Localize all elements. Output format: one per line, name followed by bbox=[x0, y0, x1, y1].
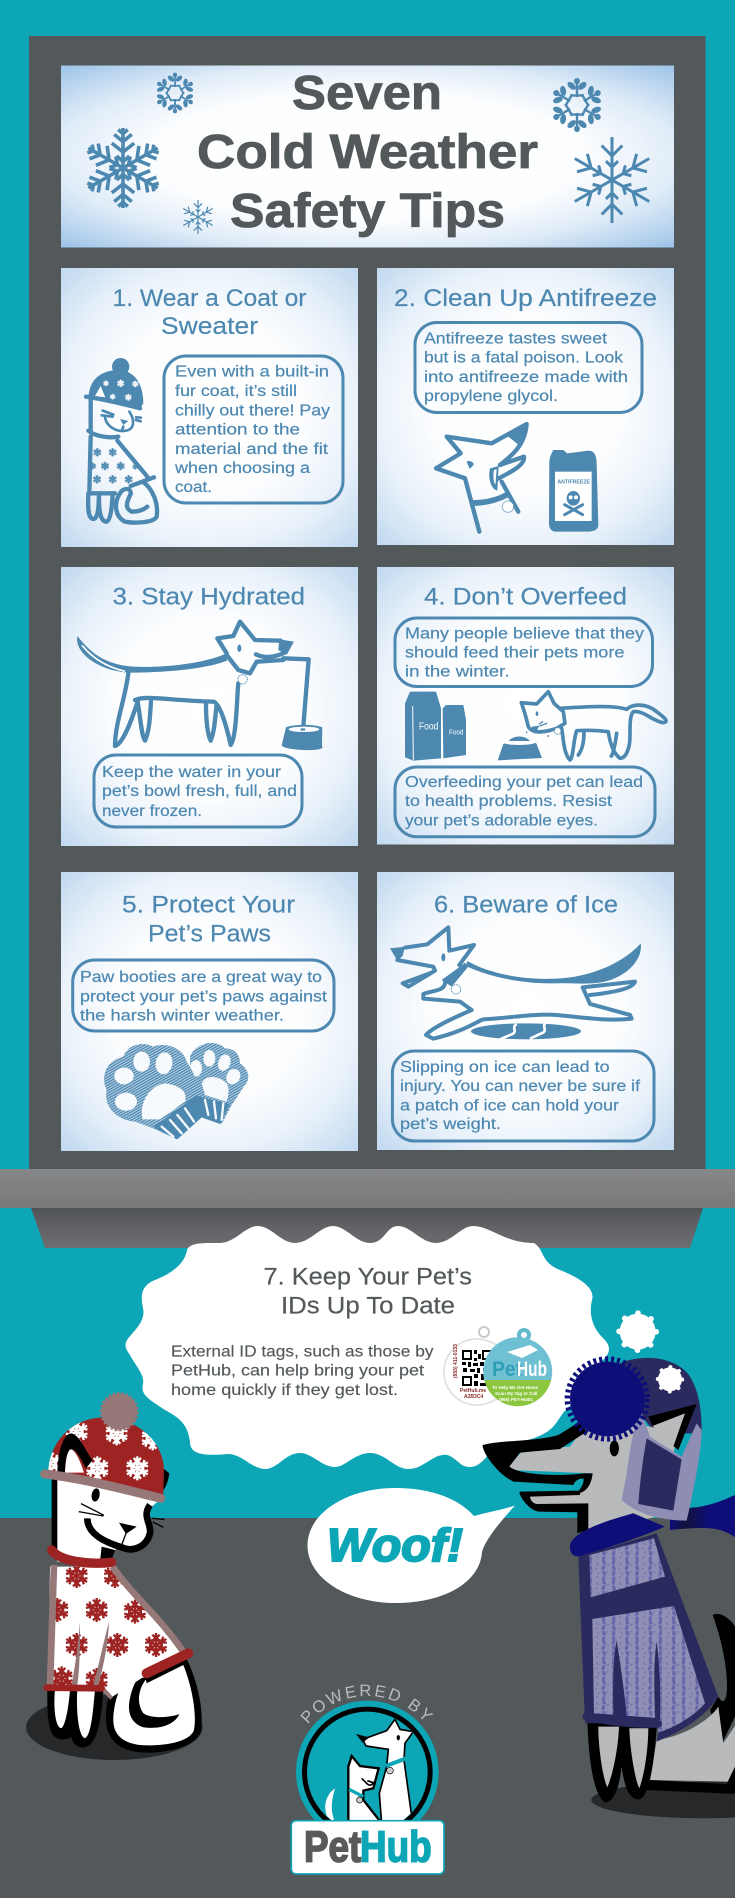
icon: pet id tags: Pet bbox=[492, 1358, 522, 1381]
logo: powered by pethub bbox=[290, 1684, 445, 1875]
heading: 4. Don’t Overfeed bbox=[424, 584, 627, 611]
callout: in the winter. bbox=[405, 664, 510, 680]
panel: tip 6 bbox=[377, 872, 674, 1150]
powered by arc: POWERED BY bbox=[300, 1684, 434, 1724]
callout: Slipping on ice can lead to bbox=[400, 1059, 610, 1076]
callout: a patch of ice can hold your bbox=[400, 1097, 619, 1114]
icon: pet id tags: PetHub.me bbox=[460, 1388, 486, 1394]
callout: into antifreeze made with bbox=[424, 369, 628, 386]
callout bbox=[415, 322, 642, 412]
heading: 2. Clean Up Antifreeze bbox=[394, 285, 657, 312]
callout: Many people believe that they bbox=[405, 626, 644, 643]
callout: Even with a built-in bbox=[175, 364, 329, 381]
heading: Pet’s Paws bbox=[148, 920, 271, 948]
icon: antifreeze jug: ANTIFREEZE bbox=[557, 480, 590, 486]
heading: 7. Keep Your Pet’s bbox=[264, 1264, 472, 1290]
icon: pet id tags: (855) PET-HUB1 bbox=[499, 1397, 534, 1402]
icon: paw booties bbox=[104, 1043, 248, 1139]
icon: snowflakes bbox=[83, 73, 654, 234]
icon: food bags bbox=[405, 692, 466, 761]
icon: cat in hat and sweater bbox=[86, 358, 157, 523]
body text: home quickly if they get lost. bbox=[171, 1382, 398, 1399]
icon: cat eating bbox=[498, 692, 666, 760]
icon: pet id tags: Hub bbox=[517, 1358, 547, 1381]
panel: title bbox=[61, 66, 674, 248]
callout: Antifreeze tastes sweet bbox=[424, 330, 608, 348]
heading: 5. Protect Your bbox=[122, 892, 295, 919]
callout: pet’s weight. bbox=[400, 1116, 501, 1133]
icon: dog drinking from bowl bbox=[77, 622, 323, 750]
icon: dog licking up bbox=[436, 423, 527, 532]
dog character bbox=[483, 1313, 735, 1818]
icon: pet id tags: (855) 411-0133 bbox=[453, 1344, 459, 1378]
title: Cold Weather bbox=[197, 126, 538, 179]
callout: chilly out there! Pay bbox=[175, 402, 330, 419]
callout: Paw booties are a great way to bbox=[80, 969, 322, 986]
callout: pet’s bowl fresh, full, and bbox=[102, 783, 297, 800]
heading bbox=[122, 892, 295, 948]
heading: 6. Beware of Ice bbox=[434, 892, 618, 919]
title: Safety Tips bbox=[230, 185, 505, 238]
logo: powered by pethub: Pet bbox=[304, 1823, 362, 1872]
callout: injury. You can never be sure if bbox=[400, 1078, 641, 1095]
callout: protect your pet’s paws against bbox=[80, 988, 328, 1006]
icon: pet id tags: A2B3C4 bbox=[464, 1394, 483, 1400]
body text: External ID tags, such as those by bbox=[171, 1344, 434, 1361]
title: Seven bbox=[292, 67, 442, 120]
callout: Overfeeding your pet can lead bbox=[405, 774, 643, 791]
panel: tip 2 bbox=[377, 268, 674, 545]
logo: powered by pethub: Hub bbox=[360, 1823, 432, 1872]
callout: Keep the water in your bbox=[102, 764, 281, 781]
body text bbox=[171, 1344, 434, 1399]
panel: tip 1 bbox=[61, 268, 358, 547]
callout: fur coat, it’s still bbox=[175, 383, 297, 400]
callout: the harsh winter weather. bbox=[80, 1008, 284, 1024]
speech bubble: woof bbox=[308, 1488, 515, 1603]
heading: 1. Wear a Coat or bbox=[112, 285, 306, 312]
dark window panel bbox=[29, 36, 706, 1170]
callout bbox=[164, 356, 343, 503]
icon: pet id tags: To Help Me Get Home bbox=[492, 1385, 539, 1390]
icon: food bags: Food bbox=[449, 727, 463, 736]
heading: 3. Stay Hydrated bbox=[112, 584, 305, 611]
woof text: Woof! bbox=[327, 1519, 463, 1571]
heading: IDs Up To Date bbox=[281, 1293, 455, 1320]
body text: PetHub, can help bring your pet bbox=[171, 1363, 425, 1380]
callout: material and the fit bbox=[175, 441, 329, 458]
callout bbox=[395, 618, 652, 686]
heading: Sweater bbox=[161, 313, 258, 340]
callout: should feed their pets more bbox=[405, 644, 624, 662]
panel: tip 5 bbox=[61, 872, 358, 1151]
ground bbox=[0, 1518, 735, 1898]
callout: coat. bbox=[175, 479, 212, 496]
icon: pet id tags: Scan My Tag or Call bbox=[495, 1391, 537, 1396]
callout bbox=[392, 1051, 654, 1141]
callout bbox=[94, 755, 302, 827]
callout: attention to the bbox=[175, 422, 300, 439]
callout: your pet’s adorable eyes. bbox=[405, 813, 598, 830]
panel: tip 4 bbox=[377, 567, 674, 844]
cat character bbox=[26, 1394, 203, 1760]
callout: but is a fatal poison. Look bbox=[424, 350, 623, 366]
callout bbox=[395, 767, 655, 837]
window sill bbox=[0, 1169, 735, 1248]
callout: propylene glycol. bbox=[424, 388, 558, 405]
callout bbox=[73, 960, 334, 1031]
icon: antifreeze jug bbox=[549, 450, 598, 532]
heading bbox=[264, 1264, 472, 1320]
title bbox=[197, 67, 538, 238]
icon: dog slipping on ice bbox=[390, 927, 641, 1039]
thought cloud: tip 7 bbox=[126, 1226, 609, 1469]
heading bbox=[112, 285, 306, 340]
callout: to health problems. Resist bbox=[405, 793, 613, 810]
icon: pet id tags bbox=[444, 1327, 556, 1410]
icon: food bags: Food bbox=[419, 721, 438, 732]
callout: never frozen. bbox=[102, 803, 202, 820]
panel: tip 3 bbox=[61, 567, 358, 846]
callout: when choosing a bbox=[174, 460, 310, 477]
